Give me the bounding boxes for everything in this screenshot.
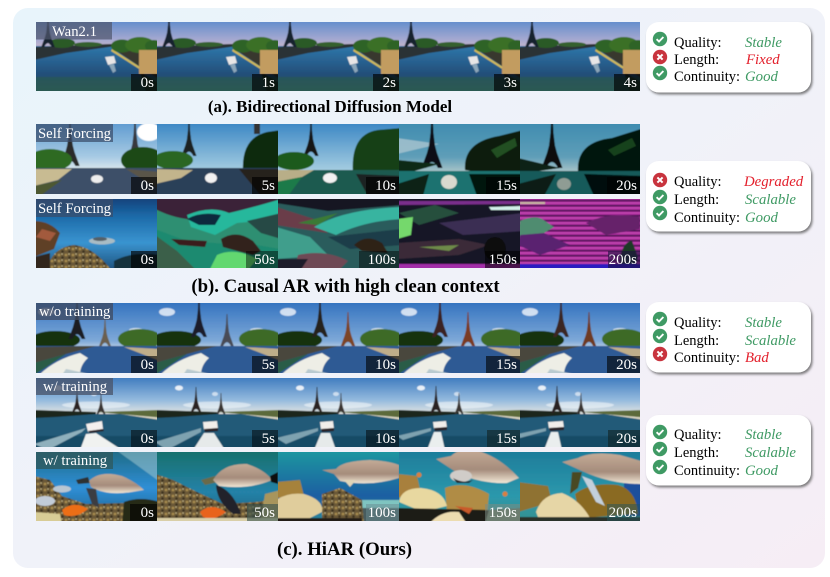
row text: continuity: Good xyxy=(745,69,778,85)
icon: continuity ok xyxy=(653,460,667,474)
frame: Wan2.1 3s: 3s xyxy=(504,75,517,91)
heading: section b: (b). Causal AR with high clean context xyxy=(191,276,500,297)
frame: w/o training 0s: w/o training xyxy=(39,304,111,320)
frame: w/ training Paris 0s xyxy=(36,378,157,447)
frame: w/ training Paris 15s xyxy=(399,378,520,447)
card: w/ training properties xyxy=(646,415,811,486)
row text: length: Scalable xyxy=(745,192,796,208)
icon: quality ok xyxy=(653,425,667,439)
frame: Wan2.1 0s: Wan2.1 xyxy=(52,24,97,40)
frame: Wan2.1 0s xyxy=(36,22,157,91)
frame: w/ training Paris 20s xyxy=(520,378,640,447)
frame: w/o training 15s: 15s xyxy=(496,357,517,373)
frame: Wan2.1 0s: 0s xyxy=(141,75,154,91)
frame: Self Forcing Paris 15s: 15s xyxy=(496,178,517,194)
frame: turtle 150s xyxy=(399,452,520,521)
frame: turtle 0s: w/ training xyxy=(43,453,108,469)
frame: Self Forcing underwater 200s xyxy=(520,199,640,268)
row text: length: Length: xyxy=(674,333,719,349)
frame: w/o training 5s xyxy=(157,303,278,373)
row text: continuity: Continuity: xyxy=(674,69,740,85)
frame: Wan2.1 2s: 2s xyxy=(383,75,396,91)
row text: quality: Degraded xyxy=(743,174,804,190)
row text: continuity: Good xyxy=(745,463,778,479)
frame: Self Forcing underwater 200s: 200s xyxy=(609,252,637,268)
heading: section a: (a). Bidirectional Diffusion Model xyxy=(208,97,452,116)
frame: w/o training 0s xyxy=(36,303,157,373)
frame: w/o training 10s: 10s xyxy=(375,357,396,373)
row text: quality: Quality: xyxy=(674,315,722,331)
frame: turtle 50s: 50s xyxy=(254,505,275,521)
frame: Self Forcing Paris 15s xyxy=(399,124,520,194)
row text: quality: Quality: xyxy=(674,174,722,190)
row text: quality: Stable xyxy=(745,35,782,51)
frame: w/o training 10s xyxy=(278,303,399,373)
row text: quality: Quality: xyxy=(674,35,722,51)
icon: length ok xyxy=(653,190,667,204)
frame: Self Forcing Paris 0s: 0s xyxy=(141,178,154,194)
icon: length fail xyxy=(653,50,667,64)
icon: quality fail xyxy=(653,173,667,187)
frame: turtle 150s: 150s xyxy=(489,505,517,521)
row text: continuity: Continuity: xyxy=(674,463,740,479)
frame: Self Forcing underwater 0s: Self Forcing xyxy=(38,201,112,217)
frame: Self Forcing underwater 50s xyxy=(157,199,278,268)
frame: Self Forcing underwater 50s: 50s xyxy=(254,252,275,268)
frame: Self Forcing underwater 100s: 100s xyxy=(368,252,396,268)
frame: turtle 50s xyxy=(157,452,278,521)
frame: Self Forcing Paris 5s xyxy=(157,124,278,194)
frame: Self Forcing Paris 0s xyxy=(36,124,157,194)
frame: Wan2.1 2s xyxy=(278,22,399,91)
row: Self Forcing Paris frames xyxy=(28,118,644,196)
icon: continuity ok xyxy=(653,206,667,220)
frame: Wan2.1 1s: 1s xyxy=(262,75,275,91)
card: Wan2.1 properties xyxy=(646,22,811,92)
row text: length: Length: xyxy=(674,52,719,68)
frame: Self Forcing underwater 0s xyxy=(36,199,157,268)
row text: quality: Stable xyxy=(745,427,782,443)
frame: Self Forcing Paris 5s: 5s xyxy=(262,178,275,194)
frame: turtle 0s xyxy=(36,452,157,521)
row: w/ training turtle frames xyxy=(34,450,644,526)
frame: Wan2.1 4s xyxy=(520,22,640,91)
frame: Self Forcing Paris 10s xyxy=(278,124,399,194)
row text: quality: Quality: xyxy=(674,427,722,443)
frame: Wan2.1 3s xyxy=(399,22,520,91)
icon: quality ok xyxy=(653,312,667,326)
row text: continuity: Bad xyxy=(745,350,769,366)
frame: w/o training 0s: 0s xyxy=(141,357,154,373)
frame: w/ training Paris 20s: 20s xyxy=(616,431,637,447)
row text: length: Scalable xyxy=(745,445,796,461)
frame: w/o training 20s: 20s xyxy=(616,357,637,373)
card: w/o training properties xyxy=(646,302,811,372)
heading: section c: (c). HiAR (Ours) xyxy=(277,539,412,560)
frame: Self Forcing underwater 100s xyxy=(278,199,399,268)
frame: Self Forcing underwater 150s: 150s xyxy=(489,252,517,268)
row: w/ training Paris frames xyxy=(34,376,644,450)
row text: length: Fixed xyxy=(745,52,780,68)
icon: length ok xyxy=(653,442,667,456)
frame: turtle 200s: 200s xyxy=(609,505,637,521)
row text: continuity: Good xyxy=(745,210,778,226)
row text: length: Scalable xyxy=(745,333,796,349)
row text: continuity: Continuity: xyxy=(674,210,740,226)
card: Causal AR properties xyxy=(646,161,811,232)
row text: quality: Stable xyxy=(745,315,782,331)
icon: quality ok xyxy=(653,32,667,46)
icon: continuity fail xyxy=(653,347,667,361)
row: Wan2.1 frames xyxy=(34,15,647,96)
icon: length ok xyxy=(653,329,667,343)
row: Self Forcing underwater frames xyxy=(34,197,644,273)
frame: w/ training Paris 0s: 0s xyxy=(141,431,154,447)
frame: turtle 100s: 100s xyxy=(368,505,396,521)
frame: w/ training Paris 5s xyxy=(157,378,278,447)
row: w/o training frames xyxy=(30,299,646,376)
frame: w/o training 5s: 5s xyxy=(262,357,275,373)
frame: w/ training Paris 5s: 5s xyxy=(262,431,275,447)
frame: Wan2.1 1s xyxy=(157,22,278,91)
frame: Self Forcing underwater 0s: 0s xyxy=(141,252,154,268)
frame: Self Forcing Paris 20s xyxy=(520,124,640,194)
frame: Wan2.1 4s: 4s xyxy=(624,75,637,91)
frame: Self Forcing underwater 150s xyxy=(399,199,520,268)
frame: w/ training Paris 10s: 10s xyxy=(375,431,396,447)
row text: length: Length: xyxy=(674,192,719,208)
frame: w/o training 15s xyxy=(399,303,520,373)
icon: continuity ok xyxy=(653,66,667,80)
frame: Self Forcing Paris 20s: 20s xyxy=(616,178,637,194)
frame: turtle 0s: 0s xyxy=(141,505,154,521)
frame: Self Forcing Paris 10s: 10s xyxy=(375,178,396,194)
frame: w/ training Paris 0s: w/ training xyxy=(43,379,108,395)
row text: length: Length: xyxy=(674,445,719,461)
frame: w/ training Paris 15s: 15s xyxy=(496,431,517,447)
frame: turtle 200s xyxy=(520,452,640,521)
frame: w/ training Paris 10s xyxy=(278,378,399,447)
frame: turtle 100s xyxy=(278,452,399,521)
frame: Self Forcing Paris 0s: Self Forcing xyxy=(38,126,112,142)
frame: w/o training 20s xyxy=(520,303,640,373)
row text: continuity: Continuity: xyxy=(674,350,740,366)
